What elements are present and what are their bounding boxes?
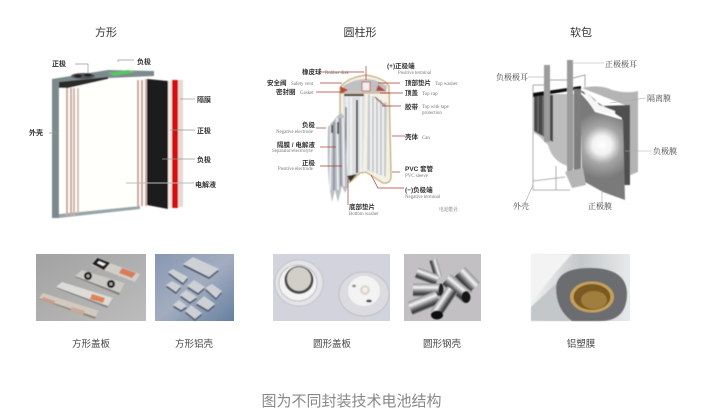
diagram: cylindrical cell: protection xyxy=(422,111,442,116)
diagram: cylindrical cell: Negative terminal xyxy=(405,195,441,200)
diagram: cylindrical cell: (+)正极端 xyxy=(387,61,415,70)
caption: 方形盖板: 方形盖板 xyxy=(72,338,110,350)
diagram: cylindrical cell xyxy=(267,61,459,217)
diagram: pouch cell xyxy=(496,59,677,211)
diagram: cylindrical cell: 壳体 xyxy=(405,132,418,141)
photo: 铝塑膜 xyxy=(531,254,630,321)
photo: 方形铝壳 xyxy=(155,254,234,321)
diagram: cylindrical cell: 电迪能社 xyxy=(439,206,459,213)
heading: 方形: 方形 xyxy=(95,25,117,39)
diagram: prismatic cell: 负极 xyxy=(137,57,151,66)
caption: 铝塑膜: 铝塑膜 xyxy=(567,338,596,350)
diagram: cylindrical cell: PVC sleeve xyxy=(405,174,428,179)
diagram: cylindrical cell: (−)负极端 xyxy=(405,185,433,194)
diagram: pouch cell: 正极膜 xyxy=(588,201,612,211)
diagram: pouch cell: 负极膜 xyxy=(653,146,677,156)
photo: 方形盖板 xyxy=(36,254,146,321)
heading: 圆柱形: 圆柱形 xyxy=(344,25,376,39)
diagram: cylindrical cell: Gasket xyxy=(300,91,314,96)
diagram: cylindrical cell: 隔膜 / 电解液 xyxy=(277,140,315,149)
diagram: cylindrical cell: Separator/electrolyte xyxy=(272,149,313,154)
diagram: prismatic cell: 负极 xyxy=(197,155,211,164)
photo: 圆形钢壳 xyxy=(404,254,481,321)
heading: 软包: 软包 xyxy=(570,25,592,39)
diagram: prismatic cell: 隔膜 xyxy=(197,95,211,104)
diagram: prismatic cell: 电解液 xyxy=(195,180,216,189)
diagram: pouch cell: 隔离膜 xyxy=(647,93,671,103)
diagram: cylindrical cell: PVC 套管 xyxy=(405,164,434,173)
diagram: cylindrical cell: 正极 xyxy=(302,158,316,167)
diagram: cylindrical cell: Negative electrode xyxy=(276,130,313,135)
photo: 圆形盖板 xyxy=(273,254,390,321)
diagram: cylindrical cell: Top with tape xyxy=(422,105,449,110)
diagram: cylindrical cell: Top washer xyxy=(435,82,458,87)
diagram: cylindrical cell: 负极 xyxy=(302,120,316,129)
caption: 方形铝壳: 方形铝壳 xyxy=(175,338,213,350)
diagram: cylindrical cell: 底部垫片 xyxy=(349,202,375,211)
diagram: cylindrical cell: Positive electrode xyxy=(278,167,313,172)
figure caption: 图为不同封装技术电池结构 xyxy=(261,393,442,410)
diagram: prismatic cell: 外壳 xyxy=(29,128,43,137)
diagram: cylindrical cell: 顶部垫片 xyxy=(405,78,431,87)
caption: 圆形盖板: 圆形盖板 xyxy=(313,338,351,350)
diagram: cylindrical cell: Rubber disk xyxy=(325,71,349,76)
diagram: cylindrical cell: Positive terminal xyxy=(398,71,432,76)
diagram: prismatic cell: 正极 xyxy=(52,59,66,68)
diagram: cylindrical cell: Top cap xyxy=(422,92,438,97)
diagram: cylindrical cell: 安全阀 xyxy=(267,78,287,87)
diagram: cylindrical cell: 橡皮球 xyxy=(302,67,322,76)
diagram: prismatic cell xyxy=(29,57,216,218)
diagram: pouch cell: 负极极耳 xyxy=(496,72,528,82)
diagram: cylindrical cell: Bottom washer xyxy=(349,212,379,217)
diagram: cylindrical cell: Can xyxy=(422,136,430,141)
diagram: cylindrical cell: Safety vent xyxy=(291,82,314,87)
diagram: pouch cell: 外壳 xyxy=(513,201,529,211)
caption: 圆形钢壳: 圆形钢壳 xyxy=(423,338,461,350)
diagram: cylindrical cell: 顶盖 xyxy=(405,88,418,97)
diagram: cylindrical cell: 密封圈 xyxy=(276,87,296,96)
diagram: pouch cell: 正极极耳 xyxy=(605,59,637,69)
diagram: cylindrical cell: 胶带 xyxy=(405,102,418,111)
diagram: prismatic cell: 正极 xyxy=(197,126,211,135)
